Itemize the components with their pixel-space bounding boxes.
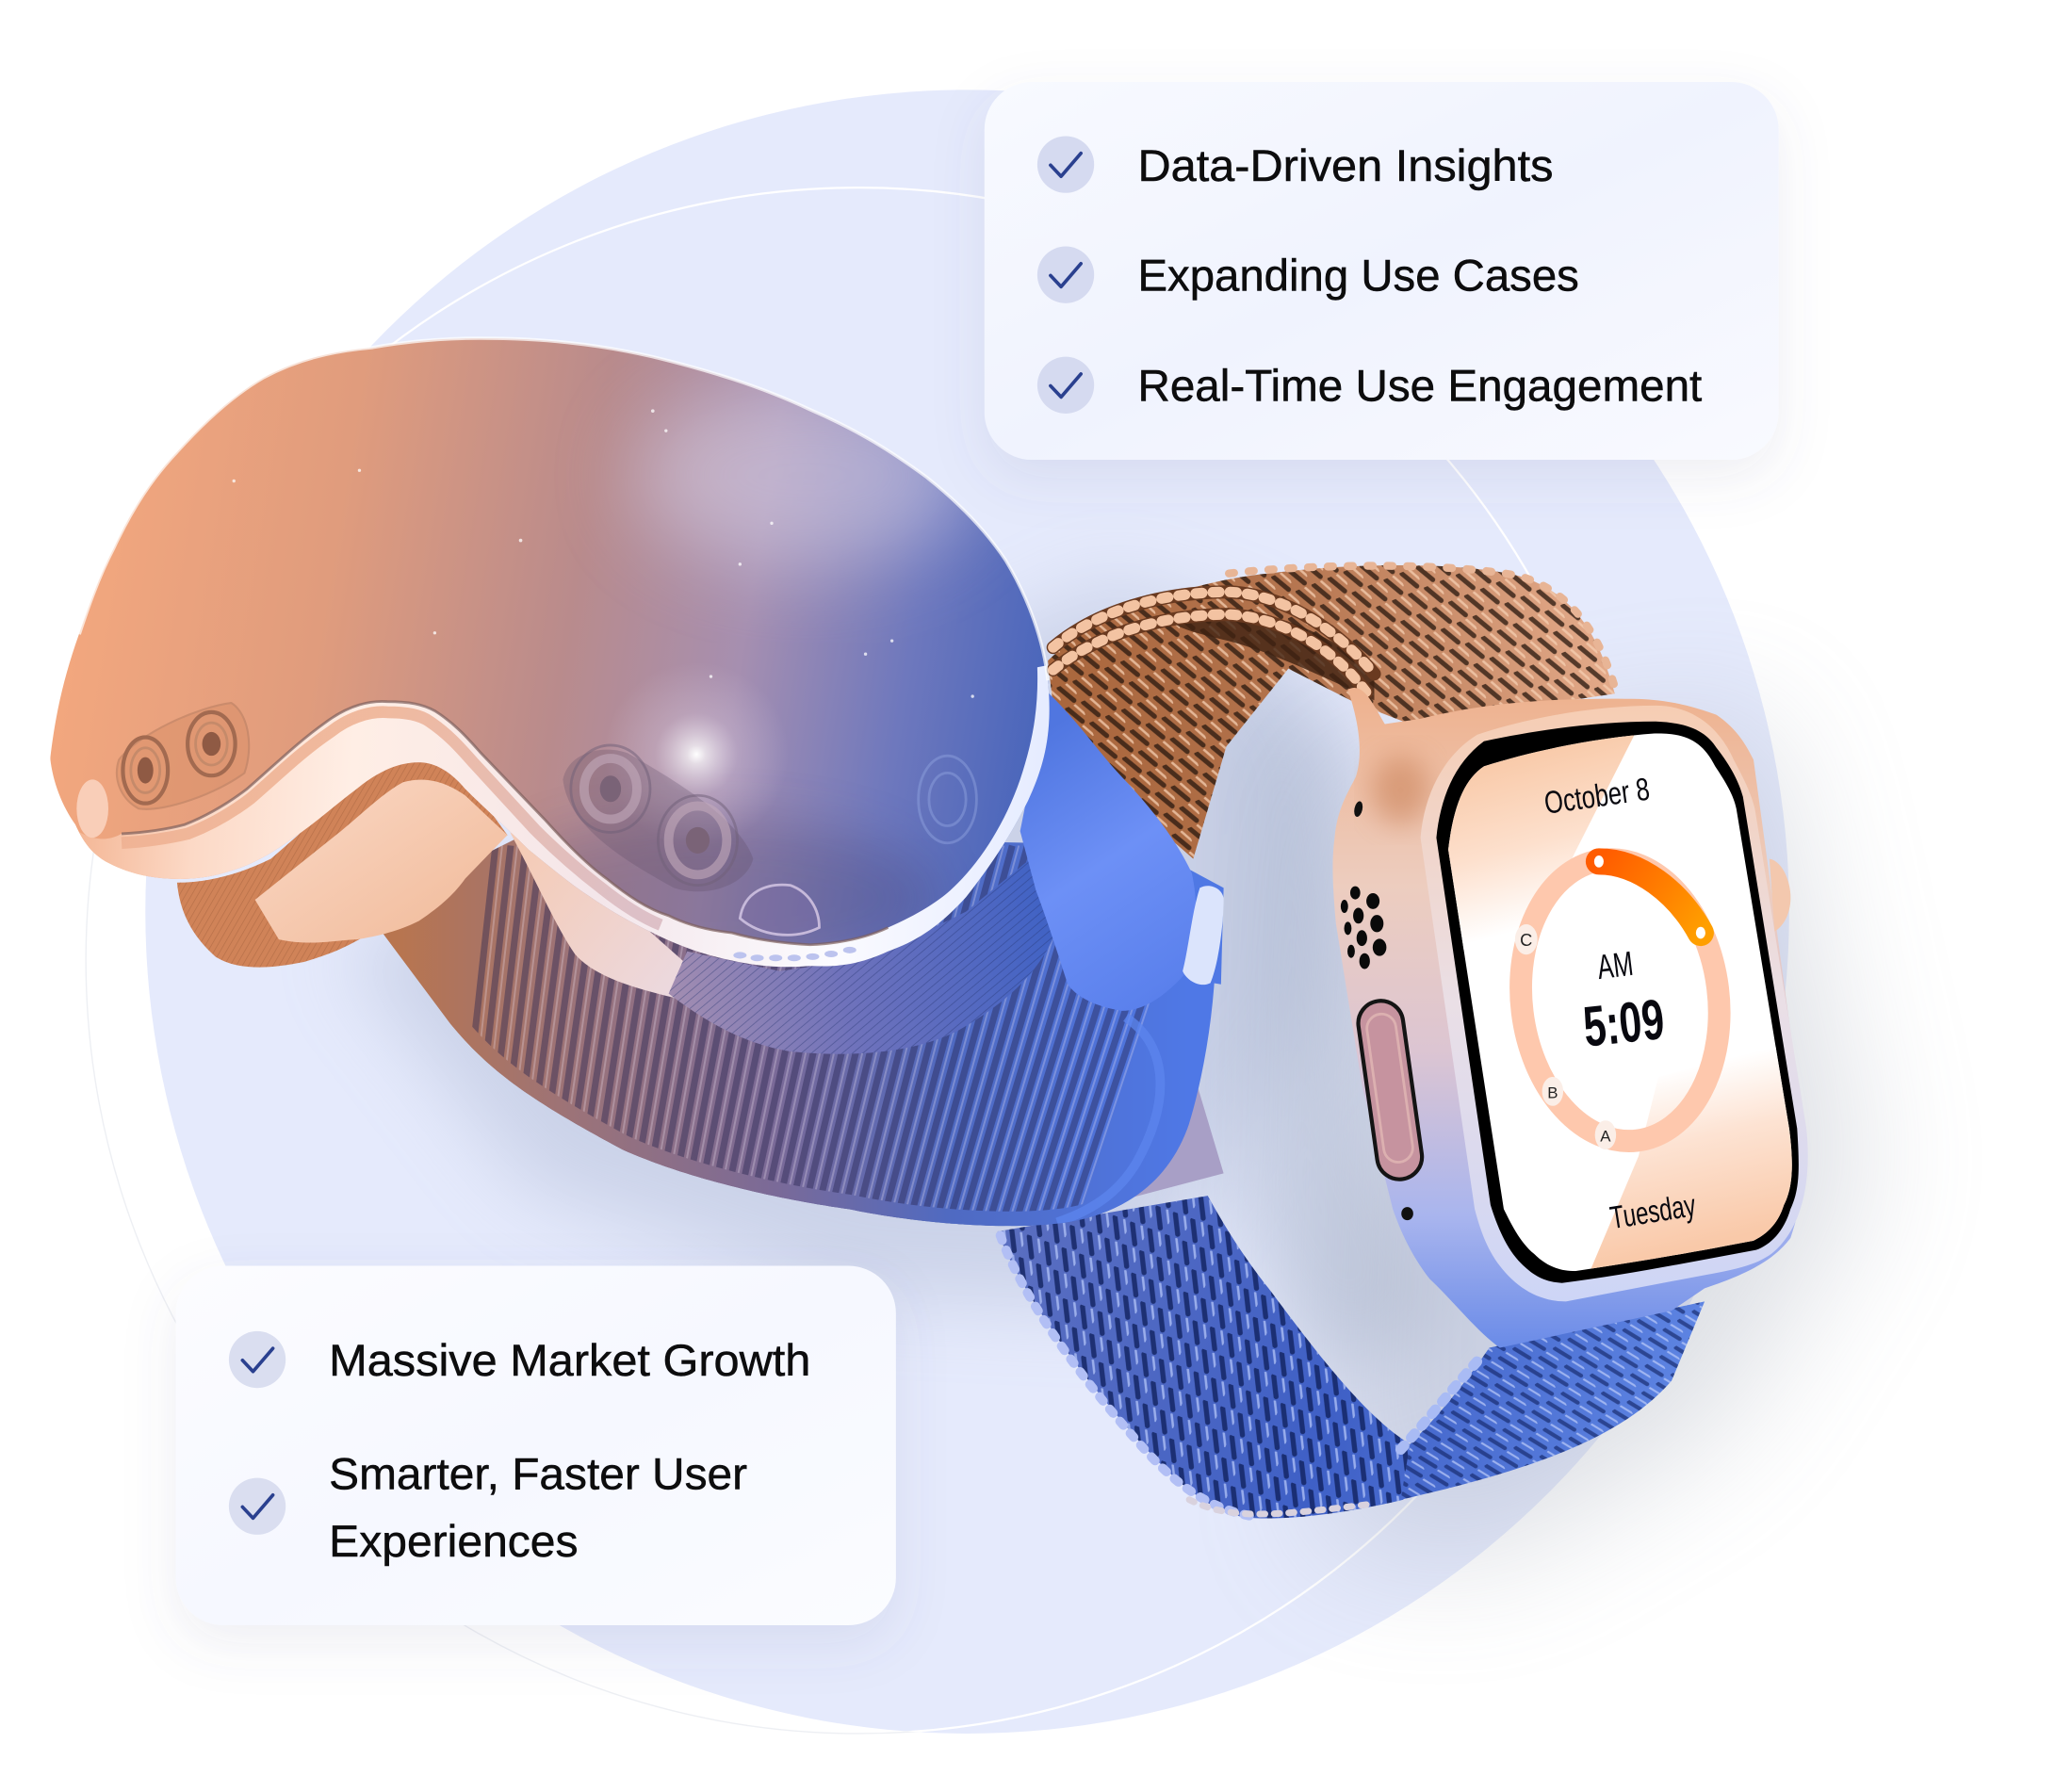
progress arc (1599, 861, 1701, 933)
card: bottom-left benefits (176, 1265, 896, 1625)
blue side connector (1020, 692, 1196, 1011)
activity ring (1505, 848, 1735, 1152)
bezel rim (1421, 706, 1808, 1301)
inner light band (510, 833, 710, 1007)
ribbed strap (377, 833, 1216, 1242)
marker C (1515, 924, 1538, 954)
bottom hole (1401, 1207, 1413, 1220)
icon: check (229, 1331, 286, 1388)
icon: check (1037, 247, 1094, 303)
blue curved overlay (1057, 1018, 1160, 1222)
speaker holes (1341, 887, 1386, 969)
front cameras left (117, 703, 249, 809)
right lobe (1401, 1301, 1705, 1500)
row: Real-Time Use Engagement: Real-Time Use Engagement (1137, 361, 1702, 411)
icon: check (229, 1478, 286, 1535)
card: top-right benefits (985, 82, 1779, 460)
headset (26, 318, 1224, 1242)
watch screen (1448, 733, 1792, 1272)
icon: check (1037, 136, 1094, 193)
black bezel (1436, 722, 1799, 1283)
row: Data-Driven Insights: Data-Driven Insights (1137, 140, 1554, 190)
woven band (669, 846, 1060, 1054)
row: Massive Market Growth: Massive Market Growth (329, 1335, 810, 1385)
visor rim highlight (79, 338, 1048, 680)
row: Expanding Use Cases: Expanding Use Cases (1137, 251, 1579, 301)
left lobe (998, 1196, 1410, 1519)
strap lower margin (377, 925, 1189, 1226)
action button (1355, 998, 1425, 1182)
row: Smarter, Faster User Experiences (229, 1449, 747, 1566)
row: Data-Driven Insights (1037, 136, 1554, 193)
clip bracket (1183, 870, 1224, 985)
strap clip button (1183, 886, 1224, 985)
orbit ring line (86, 187, 1632, 1734)
left small glow (76, 779, 108, 838)
band fold shadow (1169, 610, 1374, 700)
day text: Tuesday (1607, 1188, 1698, 1236)
soft product shadow (344, 581, 1863, 1559)
watch band: copper mesh (1048, 565, 1615, 859)
lower visor bump (740, 885, 819, 935)
band chain edge (1053, 566, 1615, 692)
background circle (145, 90, 1789, 1734)
bottom sensor dots (733, 947, 857, 961)
watch case (1332, 688, 1806, 1347)
sensor right (919, 756, 976, 843)
visor glass (50, 338, 1050, 967)
marker A: A (1600, 1128, 1611, 1146)
row: Smarter, Faster User Experiences: Smarter, Faster User (329, 1449, 747, 1499)
date text: October 8 (1542, 773, 1652, 822)
peach corner top (1441, 726, 1639, 958)
front cameras center (563, 745, 753, 891)
visor lower lip overlay (79, 665, 1050, 967)
crown (1770, 859, 1790, 932)
smart watch (1332, 688, 1823, 1347)
peach corner bottom (1589, 1037, 1810, 1275)
band chain edge (1001, 1235, 1480, 1517)
metal plate (1103, 1081, 1224, 1205)
sparkle dots (233, 409, 974, 698)
row: Smarter, Faster User Experiences: Experiences (329, 1516, 579, 1566)
mic hole (1353, 801, 1364, 818)
peach glass lip (122, 712, 661, 925)
marker A (1595, 1120, 1616, 1149)
marker C: C (1520, 930, 1532, 950)
light seal pad (255, 780, 508, 943)
face seal fabric (177, 753, 508, 968)
icon: check (1037, 357, 1094, 414)
time text: 5:09 (1580, 986, 1667, 1059)
watch band: blue mesh (998, 1196, 1705, 1519)
AM text: AM (1595, 944, 1635, 986)
marker B (1542, 1077, 1563, 1106)
copper shading near lug (1372, 756, 1429, 824)
marker B: B (1547, 1083, 1558, 1101)
